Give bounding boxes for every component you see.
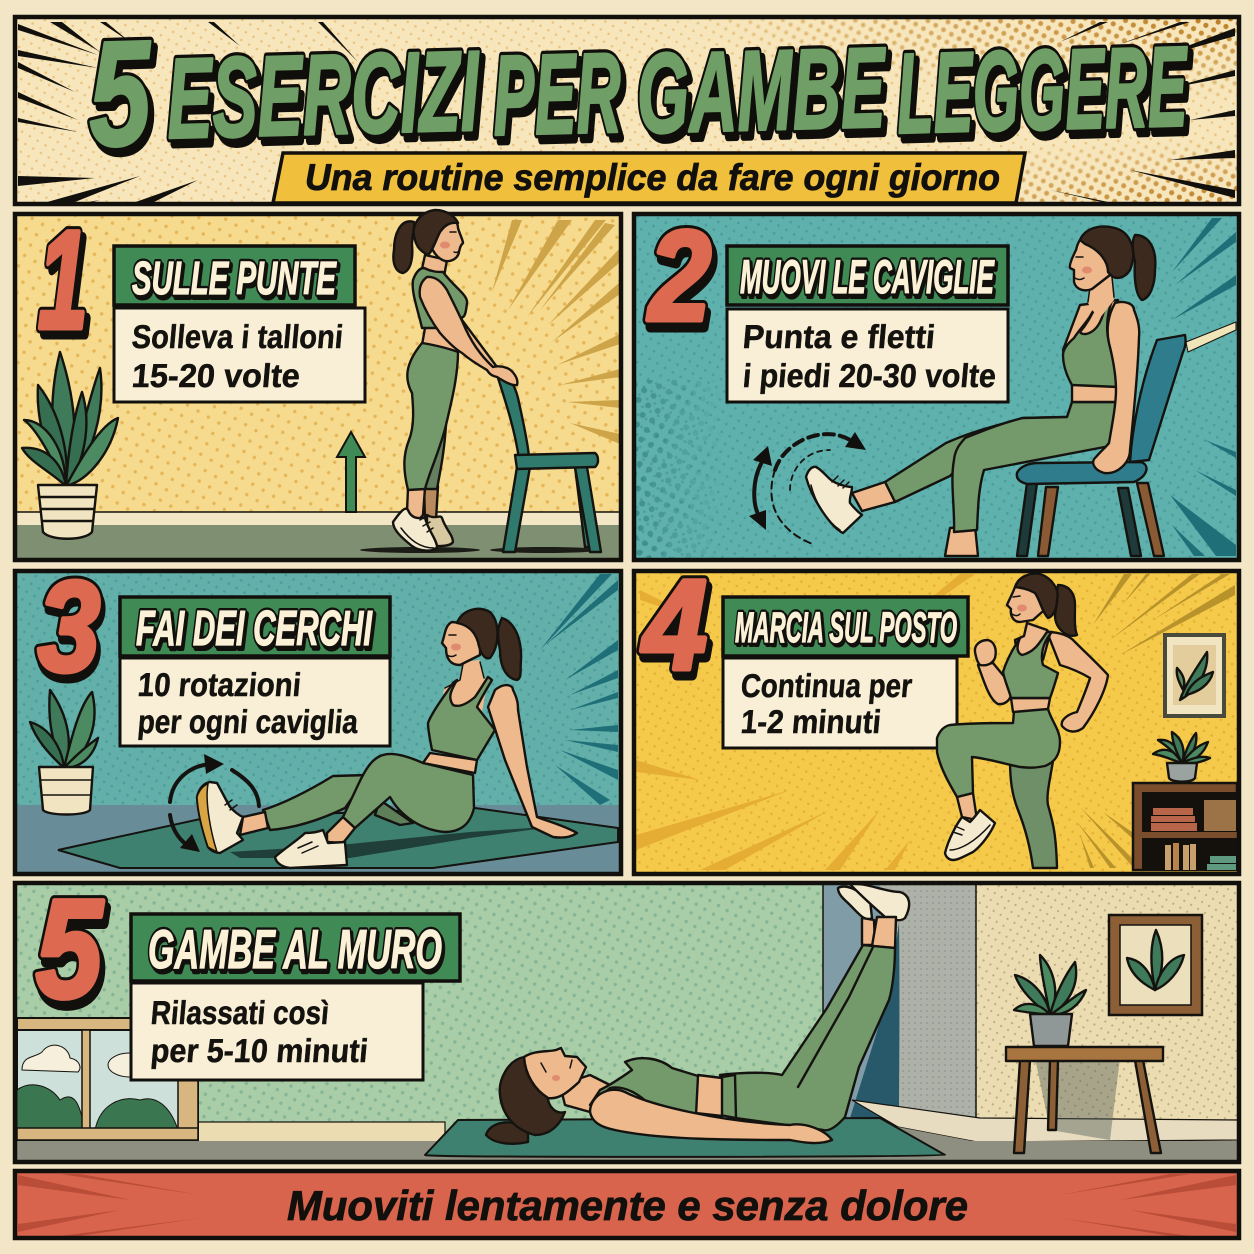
subtitle ribbon: Una routine semplice da fare ogni giorno (305, 157, 1000, 198)
title text: ESERCIZI (169, 34, 486, 169)
baseboard and floor (15, 1100, 1239, 1162)
figure: woman on tiptoes (393, 210, 517, 551)
floor (15, 512, 621, 560)
picture frame (1165, 635, 1224, 716)
mat (425, 1118, 945, 1157)
heading: sulle punte: SULLE PUNTE (132, 252, 337, 304)
floor and mat (15, 805, 621, 874)
panel 1: sulle punte (15, 201, 621, 560)
step number 3: 3 (38, 556, 100, 699)
title text: ESERCIZI (165, 28, 482, 163)
heading: muovi le caviglie (727, 246, 1008, 306)
step number 1 (36, 226, 91, 340)
text: punta e fletti: Punta e fletti (741, 319, 937, 356)
chair (498, 376, 601, 552)
text: solleva i talloni: 15-20 volte (130, 358, 302, 395)
step number 1: 1 (42, 207, 92, 364)
heading: gambe al muro: GAMBE AL MURO (150, 921, 444, 983)
heading: marcia sul posto: MARCIA SUL POSTO (737, 606, 959, 654)
figure: seated woman (806, 226, 1155, 556)
step number 5 (32, 895, 112, 1011)
text: continua per: Continua per (739, 668, 914, 705)
picture frame (1109, 915, 1202, 1015)
text: punta e fletti: i piedi 20-30 volte (741, 358, 998, 395)
footer banner (15, 1171, 1239, 1238)
title text: 5 (86, 8, 155, 178)
heading: muovi le caviglie: MUOVI LE CAVIGLIE (740, 250, 995, 303)
title text: PER (491, 30, 623, 160)
title text: PER (495, 36, 627, 166)
heading: gambe al muro (131, 914, 460, 983)
step number 3: 3 (38, 556, 100, 699)
step number 4: 4 (640, 554, 707, 697)
icon: rotation arrows (170, 754, 259, 852)
text: solleva i talloni (114, 308, 365, 402)
panel 5: gambe al muro (15, 870, 1239, 1162)
text: 10 rotazioni (120, 658, 390, 746)
text: 10 rotazioni: 10 rotazioni (136, 667, 303, 704)
text: continua per: 1-2 minuti (739, 704, 883, 741)
chair (1017, 335, 1186, 556)
title text: ESERCIZI (165, 28, 482, 163)
heading: gambe al muro: GAMBE AL MURO (148, 918, 442, 980)
step number 4: 4 (643, 560, 710, 703)
heading: muovi le caviglie: MUOVI LE CAVIGLIE (740, 250, 995, 303)
step number 2: 2 (647, 205, 711, 348)
step number 2 (642, 225, 718, 332)
icon: plant (22, 352, 118, 539)
step number 5: 5 (39, 877, 107, 1034)
heading: fai dei cerchi: FAI DEI CERCHI (138, 605, 375, 659)
panel 3: fai dei cerchi (15, 556, 621, 874)
title text: 5 (90, 14, 159, 184)
figure: woman with legs up the wall (486, 884, 909, 1144)
heading: sulle punte: SULLE PUNTE (132, 252, 337, 304)
panel 4: marcia sul posto (634, 554, 1239, 874)
heading: marcia sul posto: MARCIA SUL POSTO (735, 604, 957, 652)
heading: muovi le caviglie: MUOVI LE CAVIGLIE (742, 253, 997, 306)
title text: GAMBE (635, 24, 888, 158)
step number 4 (636, 575, 713, 680)
step number 1: 1 (38, 201, 88, 358)
figure: seated woman on mat (197, 609, 577, 868)
step number 2: 2 (650, 212, 714, 355)
title text: GAMBE (635, 24, 888, 158)
text: rilassati così (131, 983, 423, 1080)
heading: fai dei cerchi (120, 597, 390, 659)
text: rilassati così: per 5-10 minuti (149, 1033, 370, 1070)
icon: plant (1153, 732, 1210, 782)
icon: up arrow (337, 432, 365, 512)
step number 4: 4 (640, 554, 707, 697)
title text: 5 (86, 8, 155, 178)
heading: marcia sul posto (723, 597, 968, 656)
heading: fai dei cerchi: FAI DEI CERCHI (136, 602, 373, 656)
title text: PER (491, 30, 623, 160)
window (17, 1018, 198, 1140)
step number 2: 2 (647, 205, 711, 348)
heading: sulle punte (114, 246, 355, 307)
title text: GAMBE (639, 30, 892, 164)
step number 5: 5 (36, 870, 104, 1027)
heading: gambe al muro: GAMBE AL MURO (148, 918, 442, 980)
step number 5: 5 (36, 870, 104, 1027)
panel 2: muovi le caviglie (634, 205, 1239, 560)
step number 3 (34, 576, 106, 684)
heading: fai dei cerchi: FAI DEI CERCHI (136, 602, 373, 656)
bookshelf (1133, 783, 1237, 870)
text: solleva i talloni: Solleva i talloni (130, 319, 345, 356)
side table with plant (1006, 955, 1163, 1153)
step number 1: 1 (38, 201, 88, 358)
title panel (15, 8, 1239, 222)
heading: sulle punte: SULLE PUNTE (134, 255, 339, 307)
step number 3: 3 (40, 562, 102, 705)
figure: marching woman (937, 574, 1108, 868)
text: continua per (723, 658, 957, 748)
text: rilassati così: Rilassati così (149, 995, 331, 1032)
text: punta e fletti (727, 309, 1008, 402)
icon: plant (30, 690, 98, 814)
icon: motion arrows (749, 432, 866, 545)
footer banner: Muoviti lentamente e senza dolore (287, 1182, 968, 1229)
heading: marcia sul posto: MARCIA SUL POSTO (735, 604, 957, 652)
text: 10 rotazioni: per ogni caviglia (136, 704, 360, 741)
title text (86, 8, 1194, 184)
